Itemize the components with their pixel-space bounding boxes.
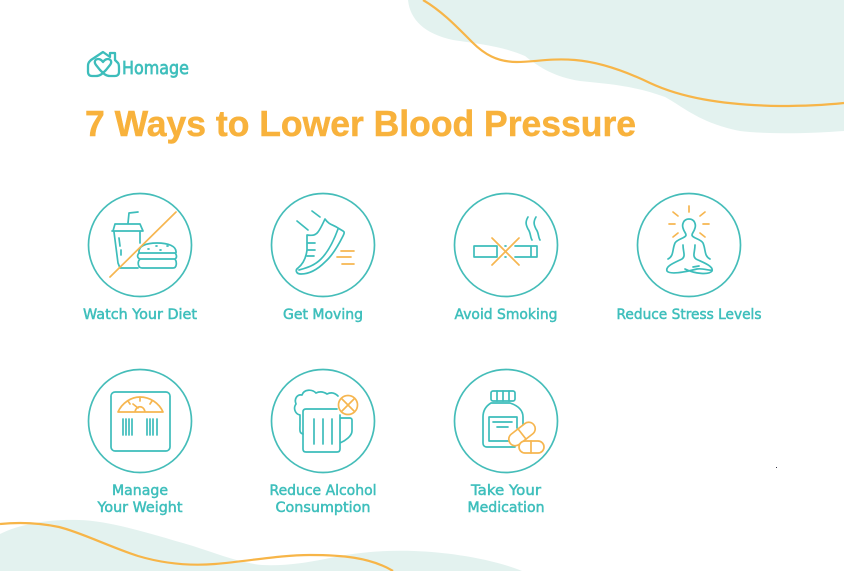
label: Reduce Alcohol Consumption (270, 483, 376, 516)
background blob: bottom left (0, 520, 522, 571)
item: Avoid Smoking (454, 194, 558, 296)
icon: speed lines (337, 251, 354, 264)
label: Manage Your Weight (96, 483, 183, 516)
icon: meditating person (667, 206, 712, 273)
label: Take Your Medication: Medication (468, 500, 544, 516)
label: Avoid Smoking: Avoid Smoking (454, 307, 558, 323)
label: Reduce Alcohol Consumption: Consumption (276, 500, 370, 516)
label: Take Your Medication (468, 483, 544, 516)
label: Manage Your Weight: Your Weight (96, 500, 183, 516)
icon: pill bottle (483, 391, 544, 453)
item: Manage Your Weight (88, 370, 192, 472)
icon: no sign (338, 396, 358, 414)
icon circle (272, 370, 374, 472)
wavy line: bottom left (0, 523, 393, 571)
icon: running shoe (296, 211, 354, 274)
label: Get Moving: Get Moving (283, 307, 363, 323)
label: Reduce Stress Levels: Reduce Stress Levels (616, 307, 762, 323)
icon circle (272, 194, 374, 296)
icon: scale dial (118, 397, 163, 412)
logo: Homage (88, 52, 189, 79)
icon: weighing scale (111, 392, 170, 451)
label: Reduce Alcohol Consumption: Reduce Alcohol (270, 483, 376, 499)
icon: cross (492, 238, 519, 265)
icon circle (88, 370, 192, 472)
icon: beer mug (295, 390, 358, 452)
icon circle (88, 194, 192, 296)
background blob: top right (408, 0, 844, 133)
label: Watch Your Diet: Watch Your Diet (83, 307, 198, 323)
item: Watch Your Diet (88, 194, 192, 296)
icon circle (454, 370, 558, 472)
icon: strike line (110, 212, 176, 277)
wavy line: top right (423, 0, 844, 106)
item: Get Moving (272, 194, 374, 296)
icon: pills (506, 420, 544, 453)
label: Manage Your Weight: Manage (112, 483, 168, 499)
icon circle (638, 194, 740, 296)
item: Take Your Medication (454, 370, 558, 472)
icon: drink and burger (110, 212, 176, 277)
logo icon: house with heart (88, 52, 119, 76)
title: 7 Ways to Lower Blood Pressure (85, 103, 636, 144)
icon: cigarette and smoke (474, 217, 540, 265)
logo wordmark: Homage (122, 59, 189, 79)
icon circle (454, 194, 558, 296)
item: Reduce Stress Levels (638, 194, 740, 296)
label: Take Your Medication: Take Your (470, 483, 541, 499)
icon: rays (669, 206, 709, 237)
item: Reduce Alcohol Consumption (272, 370, 374, 472)
